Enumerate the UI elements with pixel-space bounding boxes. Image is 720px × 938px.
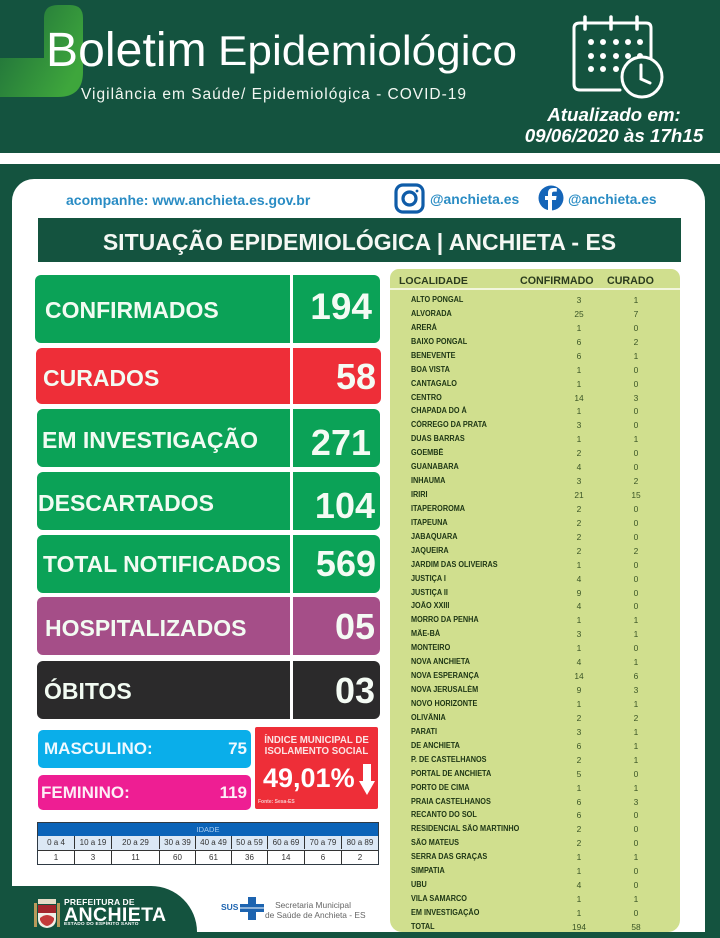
table rows: CÓRREGO DA PRATA <box>411 420 487 429</box>
age table header: IDADE <box>197 825 219 834</box>
table rows: 1 <box>577 852 581 862</box>
table rows: 2 <box>634 713 638 723</box>
table rows: 1 <box>634 894 638 904</box>
table rows: CANTAGALO <box>411 379 457 388</box>
table rows: JAQUEIRA <box>411 546 449 555</box>
stat: confirmados <box>35 275 380 343</box>
title: Epidemiológico: Epidemiológico <box>218 27 517 74</box>
table rows: TOTAL <box>411 922 435 931</box>
table rows: 0 <box>634 908 638 918</box>
age counts row: 36 <box>245 853 254 862</box>
table rows: 0 <box>634 810 638 820</box>
age ranges row: 30 a 39 <box>164 838 191 847</box>
icon: SUS cross <box>240 897 264 920</box>
table rows: 194 <box>572 922 586 932</box>
table rows: NOVA ESPERANÇA <box>411 671 479 680</box>
table rows: RECANTO DO SOL <box>411 810 477 819</box>
feminino label: FEMININO: <box>41 783 130 802</box>
table rows: 1 <box>634 657 638 667</box>
table rows: 2 <box>577 838 581 848</box>
secretaria text <box>265 900 366 920</box>
stat: obitos: 03 <box>335 670 375 711</box>
table rows: 0 <box>634 838 638 848</box>
table rows: 1 <box>577 323 581 333</box>
logo text: estado: ESTADO DO ESPÍRITO SANTO <box>64 922 139 927</box>
header band <box>0 0 720 153</box>
table rows: 0 <box>634 601 638 611</box>
table rows: 6 <box>577 797 581 807</box>
table rows: 6 <box>577 337 581 347</box>
update label: Atualizado em: <box>547 104 681 125</box>
table rows: 0 <box>634 824 638 834</box>
age counts row: 11 <box>131 853 140 862</box>
age counts row <box>54 851 362 864</box>
table rows: 4 <box>577 601 581 611</box>
table rows: 6 <box>577 810 581 820</box>
table rows: 0 <box>634 880 638 890</box>
table rows: 1 <box>577 643 581 653</box>
stat: curados: CURADOS <box>43 365 159 391</box>
icon: facebook <box>538 186 564 210</box>
callout heading: ISOLAMENTO SOCIAL <box>265 746 368 757</box>
table rows: JARDIM DAS OLIVEIRAS <box>411 560 498 569</box>
section heading bar <box>38 218 681 262</box>
table rows: 0 <box>634 379 638 389</box>
table rows: 4 <box>577 657 581 667</box>
title: Boletim: Boletim <box>46 24 207 77</box>
table rows: ITAPEUNA <box>411 518 448 527</box>
table rows: OLIVÂNIA <box>411 713 446 722</box>
table rows: 3 <box>577 727 581 737</box>
stat: descartados: 104 <box>315 485 375 526</box>
table rows: 1 <box>577 894 581 904</box>
table rows: PRAIA CASTELHANOS <box>411 797 491 806</box>
table rows: ITAPEROROMA <box>411 504 465 513</box>
table rows: 1 <box>634 434 638 444</box>
table rows: 6 <box>634 671 638 681</box>
table rows: 4 <box>577 880 581 890</box>
table rows: 1 <box>634 699 638 709</box>
table rows: JUSTIÇA II <box>411 588 448 597</box>
stat: total notificados <box>37 535 380 593</box>
icon: instagram <box>394 183 425 214</box>
stat: hospitalizados: HOSPITALIZADOS <box>45 615 246 641</box>
stat: em investigacao <box>37 409 380 467</box>
white divider <box>0 153 720 164</box>
age ranges row: 40 a 49 <box>200 838 227 847</box>
table rows: 2 <box>577 448 581 458</box>
table rows: BENEVENTE <box>411 351 456 360</box>
table rows: SIMPATIA <box>411 866 445 875</box>
table rows: 0 <box>634 420 638 430</box>
instagram handle: @anchieta.es <box>430 191 519 207</box>
table rows: 0 <box>634 462 638 472</box>
table rows: IRIRI <box>411 490 428 499</box>
table rows: JABAQUARA <box>411 532 458 541</box>
table rows: 0 <box>634 504 638 514</box>
table rows: 1 <box>577 406 581 416</box>
table rows: 0 <box>634 574 638 584</box>
age counts row: 1 <box>54 853 58 862</box>
feminino bar <box>38 775 251 810</box>
age ranges row: 20 a 29 <box>122 838 149 847</box>
age ranges row <box>38 836 378 851</box>
callout value: 49,01% <box>263 763 355 793</box>
table rows: P. DE CASTELHANOS <box>411 755 487 764</box>
secretaria text: de Saúde de Anchieta - ES <box>265 910 366 920</box>
table rows: 2 <box>577 824 581 834</box>
table rows: 1 <box>634 727 638 737</box>
table rows: 1 <box>634 295 638 305</box>
bottom dark strip <box>0 932 720 938</box>
icon: down arrow <box>359 764 375 795</box>
table rows: 1 <box>634 783 638 793</box>
age counts row: 14 <box>282 853 290 862</box>
stat: total notificados: 569 <box>316 543 376 584</box>
table rows: 1 <box>577 379 581 389</box>
age ranges row: 50 a 59 <box>236 838 263 847</box>
table rows: 1 <box>577 615 581 625</box>
table rows: 3 <box>634 685 638 695</box>
icon: green check accent <box>0 5 83 97</box>
table rows: 3 <box>577 629 581 639</box>
table rows: MÃE-BÁ <box>411 629 440 638</box>
stat: obitos: ÓBITOS <box>44 678 132 704</box>
table rows: INHAUMA <box>411 476 445 485</box>
table rows: 14 <box>574 393 584 403</box>
age counts row: 2 <box>358 853 362 862</box>
logo text: prefeitura: PREFEITURA DE <box>64 897 135 907</box>
stat: curados <box>36 348 381 404</box>
table rows: PORTO DE CIMA <box>411 783 470 792</box>
table header: CURADO <box>607 275 654 287</box>
table rows: CENTRO <box>411 393 442 402</box>
table rows: 2 <box>634 476 638 486</box>
table rows: 0 <box>634 769 638 779</box>
table rows: JUSTIÇA I <box>411 574 446 583</box>
update label <box>525 104 704 146</box>
table rows: 21 <box>574 490 584 500</box>
source note: Fonte: Sesa-ES <box>258 799 295 805</box>
table rows: DE ANCHIETA <box>411 741 460 750</box>
table rows: 2 <box>577 755 581 765</box>
table rows: 1 <box>577 783 581 793</box>
table rows: SÃO MATEUS <box>411 838 459 847</box>
callout heading: ÍNDICE MUNICIPAL DE <box>264 735 369 746</box>
table rows: MONTEIRO <box>411 643 450 652</box>
table rows: 0 <box>634 323 638 333</box>
table rows: 1 <box>577 365 581 375</box>
logo text: anchieta: ANCHIETA <box>64 904 166 926</box>
age ranges row: 80 a 89 <box>347 838 373 847</box>
stat: descartados: DESCARTADOS <box>38 490 214 516</box>
table rows: 9 <box>577 685 581 695</box>
stat: curados: 58 <box>336 356 376 397</box>
table rows: EM INVESTIGAÇÃO <box>411 908 479 917</box>
table rows: 2 <box>577 518 581 528</box>
table rows: ALTO PONGAL <box>411 295 463 304</box>
table rows: 0 <box>634 532 638 542</box>
table rows <box>411 295 641 932</box>
table rows: 3 <box>634 797 638 807</box>
table rows: 14 <box>574 671 584 681</box>
table rows: 2 <box>634 546 638 556</box>
age counts row: 61 <box>209 853 218 862</box>
table rows: 2 <box>577 713 581 723</box>
table rows: 1 <box>577 866 581 876</box>
table rows: 1 <box>634 351 638 361</box>
stat: hospitalizados <box>37 597 380 655</box>
table rows: 58 <box>631 922 641 932</box>
stat: confirmados: 194 <box>310 286 372 327</box>
table rows: 1 <box>577 560 581 570</box>
isolation index callout <box>255 727 378 809</box>
table rows: DUAS BARRAS <box>411 434 465 443</box>
table rows: UBU <box>411 880 427 889</box>
icon: calendar with clock <box>572 15 664 98</box>
table rows: 1 <box>634 741 638 751</box>
table rows: GUANABARA <box>411 462 459 471</box>
age counts row: 6 <box>321 853 325 862</box>
table rows: PORTAL DE ANCHIETA <box>411 769 491 778</box>
table rows: NOVO HORIZONTE <box>411 699 477 708</box>
table header: CONFIRMADO <box>520 275 594 287</box>
age counts row: 60 <box>173 853 182 862</box>
subtitle: Vigilância em Saúde/ Epidemiológica - COVID-19 <box>81 86 467 103</box>
table rows: 6 <box>577 741 581 751</box>
age table <box>38 823 378 864</box>
table rows: 1 <box>577 908 581 918</box>
table rows: SERRA DAS GRAÇAS <box>411 852 487 861</box>
table rows: PARATI <box>411 727 437 736</box>
table rows: 5 <box>577 769 581 779</box>
table rows: 2 <box>577 504 581 514</box>
table rows: 3 <box>577 295 581 305</box>
age ranges row: 0 a 4 <box>47 838 65 847</box>
update label: 09/06/2020 às 17h15 <box>525 125 703 146</box>
feminino value: 119 <box>220 783 247 802</box>
table header <box>390 272 680 290</box>
masculino bar <box>38 730 251 768</box>
table rows: 3 <box>577 476 581 486</box>
age ranges row: 70 a 79 <box>310 838 336 847</box>
table rows: ALVORADA <box>411 309 452 318</box>
table rows: 2 <box>577 546 581 556</box>
table rows: CHAPADA DO Á <box>411 406 467 415</box>
table rows: MORRO DA PENHA <box>411 615 479 624</box>
age counts row: 3 <box>91 853 95 862</box>
table rows: 0 <box>634 518 638 528</box>
stat: hospitalizados: 05 <box>335 606 375 647</box>
table rows: 0 <box>634 406 638 416</box>
secretaria text: Secretaria Municipal <box>275 900 351 910</box>
table rows: VILA SAMARCO <box>411 894 467 903</box>
stat: em investigacao: EM INVESTIGAÇÃO <box>42 427 258 453</box>
table rows: 1 <box>634 755 638 765</box>
table rows: NOVA ANCHIETA <box>411 657 470 666</box>
table rows: ARERÁ <box>411 323 437 332</box>
table rows: 15 <box>631 490 641 500</box>
table rows: NOVA JERUSALÉM <box>411 685 478 694</box>
age ranges row: 10 a 19 <box>80 838 106 847</box>
stat: em investigacao: 271 <box>311 422 371 463</box>
table rows: GOEMBÊ <box>411 448 443 457</box>
table rows: 2 <box>634 337 638 347</box>
table rows: JOÃO XXIII <box>411 601 449 610</box>
stat: obitos <box>37 661 380 719</box>
table rows: 2 <box>577 532 581 542</box>
footer logo block <box>0 886 197 938</box>
icon: coat of arms <box>34 899 60 928</box>
table rows: RESIDENCIAL SÃO MARTINHO <box>411 824 519 833</box>
age table header <box>38 823 378 836</box>
masculino value: 75 <box>228 739 247 758</box>
table rows: 0 <box>634 588 638 598</box>
table rows: 1 <box>577 699 581 709</box>
SUS label: SUS <box>221 902 238 912</box>
table rows: 0 <box>634 866 638 876</box>
main white panel <box>12 179 705 938</box>
age ranges row: 60 a 69 <box>273 838 299 847</box>
table rows: 6 <box>577 351 581 361</box>
table rows: 4 <box>577 462 581 472</box>
website link: acompanhe: www.anchieta.es.gov.br <box>66 192 310 208</box>
table header: LOCALIDADE <box>399 275 468 287</box>
masculino label: MASCULINO: <box>44 739 153 758</box>
table rows: 0 <box>634 643 638 653</box>
table rows: 3 <box>634 393 638 403</box>
table rows: 1 <box>634 615 638 625</box>
table rows: 25 <box>574 309 584 319</box>
stat: confirmados: CONFIRMADOS <box>45 297 219 323</box>
locality table <box>390 269 680 932</box>
table rows: BAIXO PONGAL <box>411 337 467 346</box>
stat: total notificados: TOTAL NOTIFICADOS <box>43 551 281 577</box>
callout heading <box>264 734 369 757</box>
table rows: 0 <box>634 560 638 570</box>
table rows: BOA VISTA <box>411 365 450 374</box>
stat: descartados <box>37 472 380 530</box>
table rows: 7 <box>634 309 638 319</box>
table rows: 9 <box>577 588 581 598</box>
table rows: 1 <box>577 434 581 444</box>
table rows: 1 <box>634 629 638 639</box>
table rows: 4 <box>577 574 581 584</box>
section heading: SITUAÇÃO EPIDEMIOLÓGICA | ANCHIETA - ES <box>103 229 616 255</box>
table rows: 1 <box>634 852 638 862</box>
table rows: 3 <box>577 420 581 430</box>
table rows: 0 <box>634 448 638 458</box>
facebook handle: @anchieta.es <box>568 192 657 207</box>
table rows: 0 <box>634 365 638 375</box>
